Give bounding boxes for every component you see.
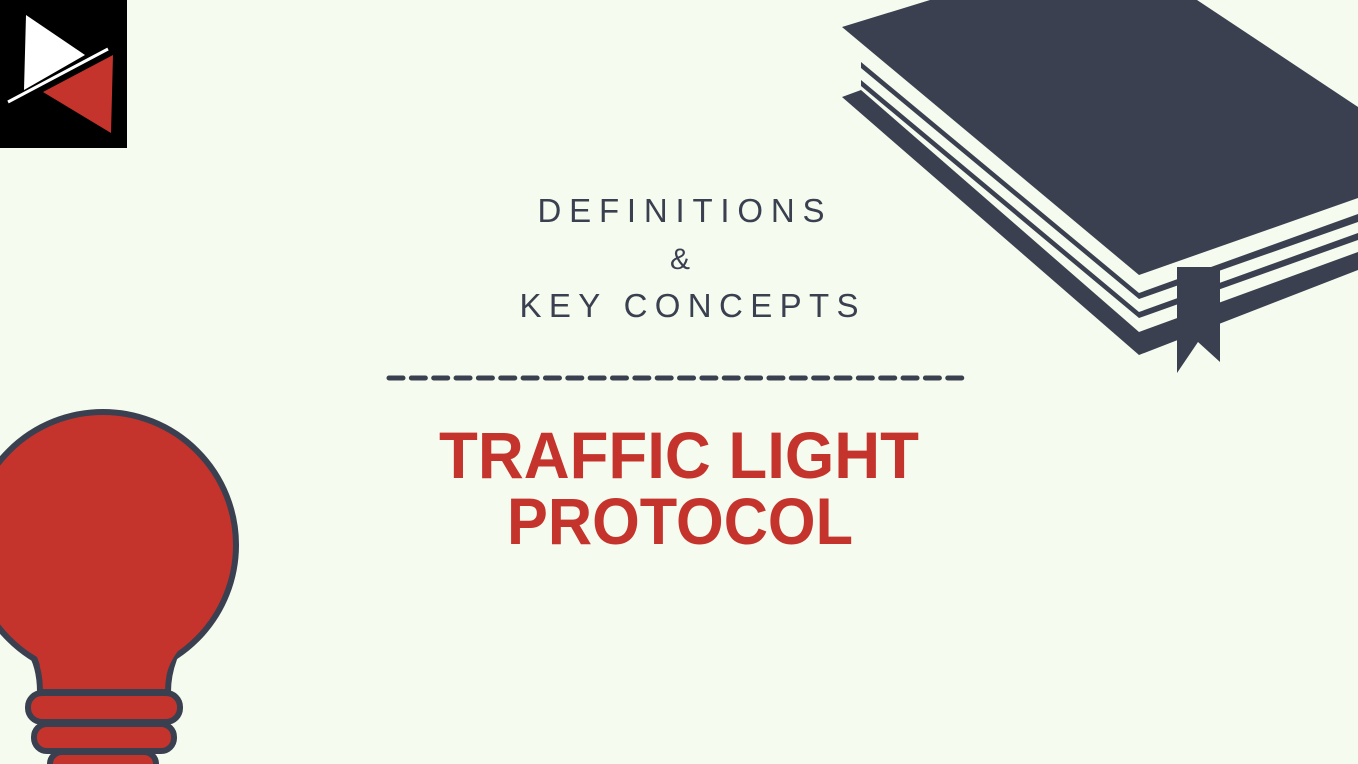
icon: book bbox=[842, 0, 1358, 373]
subtitle: definitions & key concepts bbox=[520, 192, 858, 324]
title: PROTOCOL bbox=[507, 484, 853, 558]
title: TRAFFIC LIGHT bbox=[439, 418, 919, 492]
subtitle: definitions & key concepts: & bbox=[670, 243, 690, 276]
subtitle: definitions & key concepts: DEFINITIONS bbox=[538, 192, 824, 229]
title bbox=[439, 418, 919, 558]
subtitle: definitions & key concepts: KEY CONCEPTS bbox=[520, 287, 858, 324]
divider bbox=[389, 376, 968, 380]
logo bbox=[0, 0, 127, 148]
icon: light bulb bbox=[0, 412, 236, 764]
